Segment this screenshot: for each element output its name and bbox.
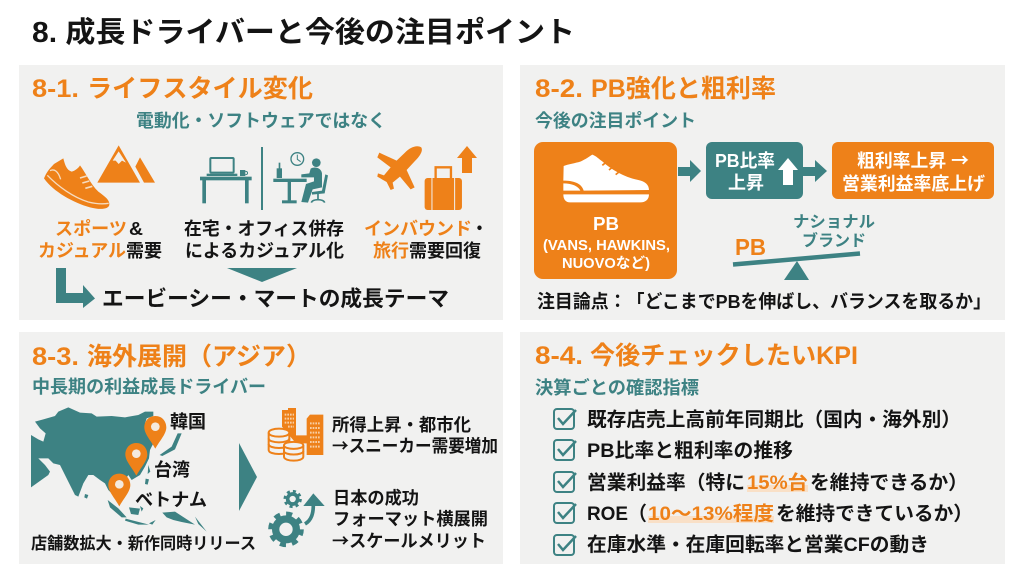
panel: 8-1 lifestyle change: [19, 65, 503, 320]
label: sports and casual: カジュアル: [38, 241, 126, 261]
icon: gears and up arrow: [271, 491, 325, 545]
map labels: 台湾: [154, 459, 190, 480]
icon: home desk with laptop: [200, 158, 252, 203]
text: Japan format rollout: [332, 488, 488, 553]
label: hybrid work casualization: 在宅・オフィス併存: [184, 219, 344, 239]
text: Japan format rollout: →スケールメリット: [332, 528, 486, 553]
icon: white up arrow: [778, 158, 798, 185]
label: inbound and travel: 需要回復: [409, 241, 481, 261]
label: national brand: [793, 214, 875, 250]
label: sports and casual: [38, 218, 162, 261]
KPI row 4: [554, 503, 973, 525]
map labels: 韓国: [170, 412, 206, 432]
subheading 8-2: 今後の注目ポイント: [535, 110, 696, 131]
KPI row 5: 在庫水準・在庫回転率と営業CFの動き: [587, 534, 929, 556]
map: Asia: [31, 407, 207, 532]
heading 8-2: PB強化と粗利率: [591, 75, 776, 103]
box: PB ratio rise: PB比率: [715, 151, 775, 171]
heading 8-2: 8-2.: [535, 75, 583, 103]
box: margin rise: 粗利率上昇 →: [857, 147, 969, 173]
PB card text: NUOVOなど): [562, 255, 650, 272]
icon: airplane: [377, 146, 422, 190]
KPI row 4: ROE（: [587, 503, 647, 525]
text: Japan format rollout: 日本の成功: [333, 488, 419, 508]
heading 8-4: 8-4.: [535, 342, 583, 370]
arrow: ratio to margin: [803, 160, 827, 182]
icon: balance scale: [733, 254, 860, 280]
text: income and urbanization: →スニーカー需要増加: [332, 433, 498, 458]
icon: white sneaker: [563, 155, 649, 202]
label: national brand: ナショナル: [793, 214, 875, 231]
label: hybrid work casualization: によるカジュアル化: [185, 241, 344, 261]
icon: buildings and coins: [269, 408, 323, 461]
highlight: 15 percent: 15%台: [747, 472, 808, 494]
label: hybrid work casualization: [184, 219, 344, 261]
text: income and urbanization: [332, 415, 498, 458]
label: national brand: ブランド: [802, 231, 866, 250]
heading 8-1: 8-1.: [32, 75, 79, 103]
arrow: downward triangle: [227, 268, 297, 282]
conclusion: growth theme: エービーシー・マートの成長テーマ: [102, 287, 449, 311]
label: inbound and travel: ・: [471, 219, 488, 239]
heading 8-4: 今後チェックしたいKPI: [590, 342, 858, 370]
label: inbound and travel: [364, 219, 488, 261]
icon: mountains: [97, 145, 155, 183]
KPI row 4: を維持できているか）: [776, 503, 973, 525]
label: sports and casual: 需要: [126, 241, 162, 261]
subheading 8-3: 中長期の利益成長ドライバー: [32, 376, 266, 397]
arrow: large right triangle: [239, 443, 257, 511]
label: inbound and travel: 旅行: [373, 241, 409, 261]
text: income and urbanization: 所得上昇・都市化: [332, 415, 471, 435]
map labels: [135, 412, 207, 510]
title: 8. 成長ドライバーと今後の注目ポイント: [32, 16, 575, 49]
pin: Korea: [144, 416, 166, 449]
label: PB on balance: PB: [735, 234, 766, 260]
panel: 8-4 KPIs: [520, 332, 1005, 564]
pin: Vietnam: [108, 474, 130, 506]
heading 8-3: 海外展開（アジア）: [87, 343, 311, 371]
box: PB ratio rise: [706, 142, 803, 199]
subheading 8-4: 決算ごとの確認指標: [535, 377, 699, 398]
map labels: ベトナム: [135, 490, 207, 510]
KPI row 3: を維持できるか）: [810, 472, 968, 494]
KPI row 3: 営業利益率（特に: [587, 472, 745, 494]
icon: suitcase: [425, 167, 462, 210]
text: Japan format rollout: フォーマット横展開: [333, 509, 488, 529]
arrow: elbow: [56, 268, 95, 308]
icon: running shoe: [44, 158, 109, 209]
KPI row 3: [554, 472, 968, 494]
PB card text: [543, 214, 670, 272]
label: inbound and travel: インバウンド: [364, 219, 472, 239]
caption: store expansion: 店舗数拡大・新作同時リリース: [31, 533, 256, 553]
box: PB ratio rise: 上昇: [728, 173, 764, 193]
PB card text: PB: [593, 214, 619, 234]
divider between home and office: [261, 147, 263, 210]
subheading 8-1: 電動化・ソフトウェアではなく: [136, 111, 386, 131]
panel: 8-2 PB and gross margin: [520, 65, 1005, 320]
PB card: [534, 142, 677, 279]
highlight: 10 to 13 percent: 10〜13%程度: [648, 503, 774, 525]
KPI row 2: PB比率と粗利率の推移: [587, 440, 793, 462]
icon: up arrow: [457, 146, 477, 173]
heading 8-1: ライフスタイル変化: [87, 75, 313, 103]
heading 8-3: 8-3.: [32, 343, 79, 371]
arrow: PB to ratio: [678, 160, 701, 182]
PB card text: (VANS, HAWKINS,: [543, 238, 670, 254]
label: sports and casual: &: [129, 219, 143, 239]
box: margin rise: 営業利益率底上げ: [842, 174, 985, 194]
pin: Taiwan: [125, 443, 147, 476]
label: sports and casual: スポーツ: [55, 218, 127, 239]
KPI row 1: 既存店売上高前年同期比（国内・海外別）: [587, 408, 961, 431]
discussion point: 注目論点：「どこまでPBを伸ばし、バランスを取るか」: [537, 291, 991, 312]
icon: office worker at desk with clock: [273, 153, 328, 203]
box: margin rise: [832, 142, 994, 199]
panel: 8-3 overseas expansion: [19, 332, 503, 564]
